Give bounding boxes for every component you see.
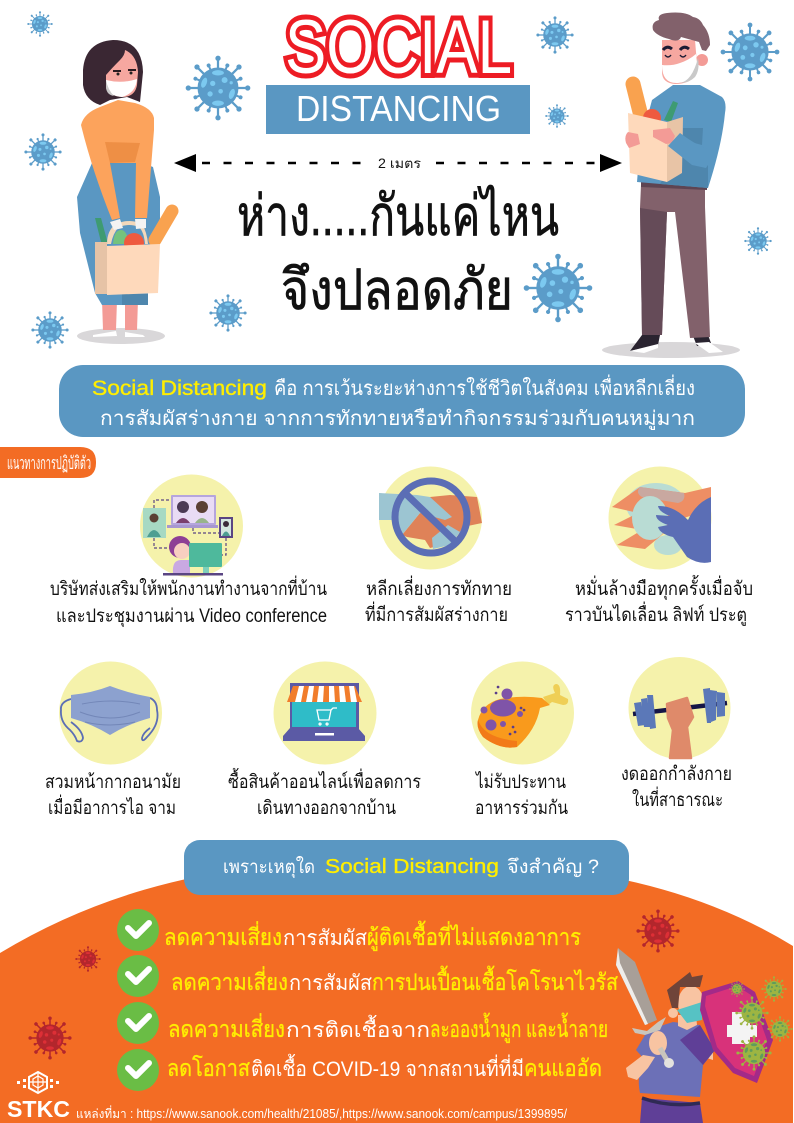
caption: และประชุมงานผ่าน Video conference — [56, 606, 327, 628]
headline — [237, 184, 559, 321]
definition panel — [59, 365, 745, 437]
caption — [45, 772, 181, 819]
subheading panel: why it matters: จึงสำคัญ ? — [507, 857, 599, 878]
arrow: 2 metres distance — [174, 154, 622, 172]
reason 1 — [117, 909, 581, 951]
blue virus decorations — [24, 11, 779, 349]
caption: สวมหน้ากากอนามัย — [45, 772, 181, 793]
subheading panel: why it matters: Social Distancing — [325, 856, 499, 878]
reason 4: ติดเชื้อ COVID-19 จากสถานที่ที่มี — [251, 1054, 524, 1081]
reason 2: การสัมผัส — [289, 972, 372, 995]
reason 3: ลดความเสี่ยง — [168, 1013, 285, 1042]
headline: ห่าง.....กันแค่ไหน — [237, 184, 559, 247]
guideline 5: shop online — [228, 662, 421, 819]
reason 4: คนแออัด — [524, 1055, 602, 1081]
caption: ซื้อสินค้าออนไลน์เพื่อลดการ — [228, 768, 421, 793]
guideline 7: no public exercise — [621, 657, 732, 811]
logo: STKC: STKC — [7, 1096, 70, 1122]
reason 4: ลดโอกาส — [167, 1055, 250, 1081]
caption: หมั่นล้างมือทุกครั้งเมื่อจับ — [575, 575, 753, 601]
guideline 3: wash hands — [565, 466, 753, 626]
illustration: man with shopping bag — [602, 12, 740, 358]
reason 2: การปนเปื้อนเชื้อโคโรนาไวรัส — [372, 966, 618, 995]
guideline 6: do not share food — [471, 662, 574, 819]
caption: งดออกกำลังกาย — [621, 764, 732, 785]
subheading panel: why it matters: เพราะเหตุใด — [223, 856, 315, 879]
icon: dumbbell — [628, 657, 730, 759]
caption: ไม่รับประทาน — [474, 771, 566, 793]
caption: ที่มีการสัมผัสร่างกาย — [365, 601, 508, 626]
title: SOCIAL: SOCIAL — [285, 5, 512, 90]
caption: เดินทางออกจากบ้าน — [257, 798, 396, 819]
icon: washing hands — [608, 466, 712, 570]
caption — [228, 768, 421, 819]
guideline 4: wear mask — [45, 662, 181, 819]
definition panel: การสัมผัสร่างกาย จากการทักทายหรือทำกิจกรรมร่วมกับคนหมู่มาก — [100, 408, 695, 431]
reason 4 — [117, 1049, 602, 1091]
icon: face mask — [59, 662, 162, 764]
red virus decorations — [28, 909, 680, 1060]
caption: บริษัทส่งเสริมให้พนักงานทำงานจากที่บ้าน — [50, 575, 327, 600]
section tab: guidelines — [0, 447, 96, 478]
subheading panel: why it matters — [184, 840, 629, 895]
icon: video conference — [140, 474, 243, 578]
caption: เมื่อมีอาการไอ จาม — [48, 794, 176, 819]
reason 3: การติดเชื้อจาก — [286, 1015, 430, 1042]
section tab: guidelines: แนวทางการปฏิบัติตัว — [7, 453, 91, 473]
reason 1: ผู้ติดเชื้อที่ไม่แสดงอาการ — [367, 921, 581, 951]
orange section background — [0, 862, 793, 1123]
caption: ในที่สาธารณะ — [632, 786, 723, 811]
guideline 2: avoid physical greeting — [365, 466, 512, 626]
caption: อาหารร่วมกัน — [475, 798, 568, 819]
title banner: DISTANCING — [266, 85, 530, 134]
caption — [50, 575, 327, 628]
reason 2: ลดความเสี่ยง — [171, 966, 288, 995]
headline: จึงปลอดภัย — [281, 258, 513, 321]
definition panel: คือ การเว้นระยะห่างการใช้ชีวิตในสังคม เพื่อหลีกเลี่ยง — [274, 374, 695, 400]
definition panel: Social Distancing — [92, 377, 267, 400]
guideline 1: work from home — [50, 474, 327, 628]
icon: online shop laptop — [274, 662, 376, 764]
caption: หลีกเลี่ยงการทักทาย — [366, 575, 512, 600]
reason 3 — [117, 1002, 608, 1044]
icon: contaminated chicken — [471, 662, 574, 764]
title banner: DISTANCING: DISTANCING — [296, 88, 501, 129]
reasons list — [117, 909, 618, 1091]
caption — [474, 771, 568, 819]
reason 3: ละอองน้ำมูก และน้ำลาย — [430, 1013, 608, 1043]
caption — [621, 764, 732, 811]
reason 1: ลดความเสี่ยง — [164, 921, 282, 950]
title: SOCIAL: SOCIAL — [285, 5, 512, 90]
caption — [365, 575, 512, 626]
reason 2 — [117, 955, 618, 997]
source line: แหล่งที่มา : https://www.sanook.com/health/21085/,https://www.sanook.com/campus/1399895/ — [76, 1105, 567, 1121]
logo: STKC — [7, 1072, 70, 1122]
reason 1: การสัมผัส — [283, 927, 367, 950]
caption: ราวบันไดเลื่อน ลิฟท์ ประตู — [565, 601, 747, 626]
caption — [565, 575, 753, 626]
illustration: woman with shopping bag — [77, 40, 172, 344]
illustration: man with sword and shield — [616, 948, 793, 1123]
arrow: 2 metres distance: 2 เมตร — [378, 156, 421, 171]
icon: no handshake — [379, 466, 482, 570]
